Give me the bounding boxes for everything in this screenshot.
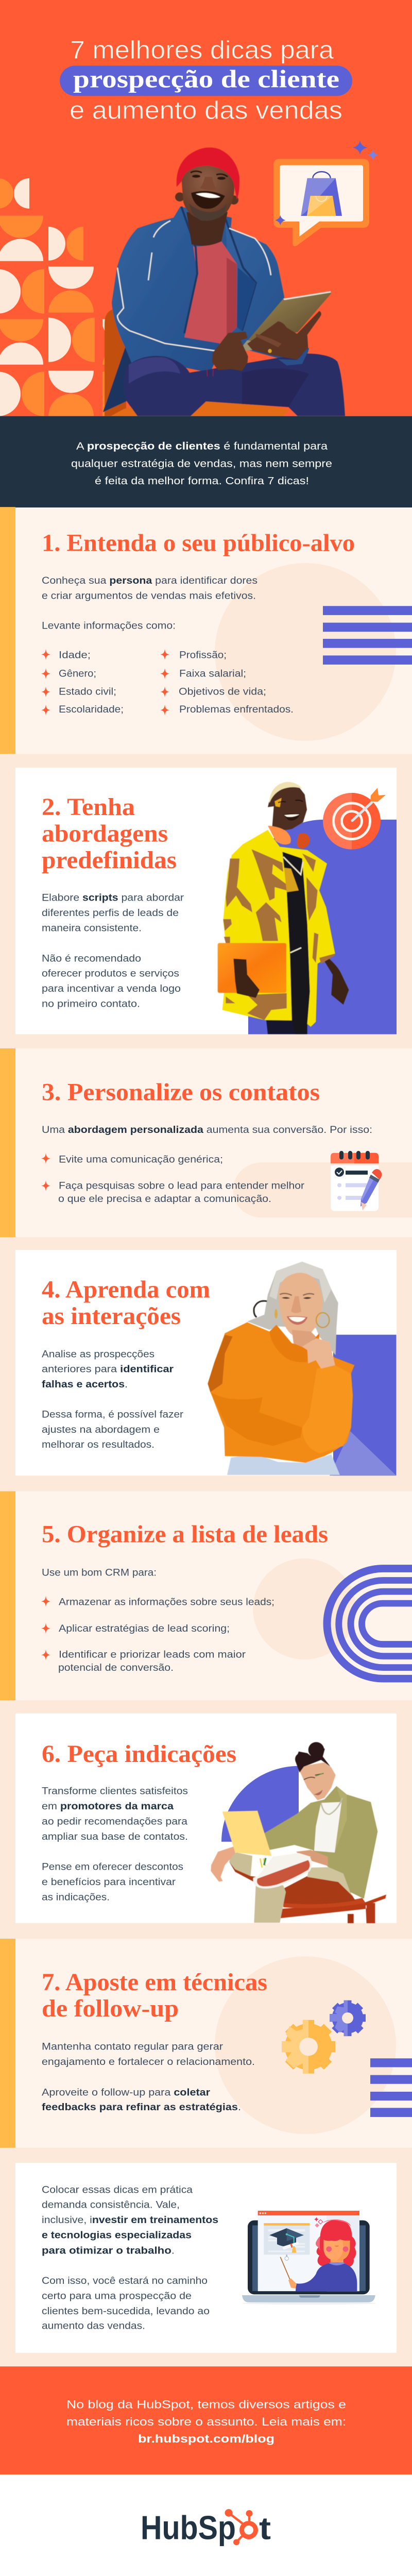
text: tip 2 body: Elabore scripts para abordar <box>42 892 184 904</box>
list: attributes right column: Objetivos de vida; <box>179 686 266 698</box>
text: conclusion body: aumento das vendas. <box>42 2320 145 2332</box>
text: tip 6 body: Pense em oferecer descontos <box>42 1861 183 1873</box>
purple backdrop shape <box>330 1335 397 1476</box>
text: conclusion body: certo para uma prospecção de <box>42 2291 192 2301</box>
photo: hands and tablet <box>207 291 331 376</box>
title: e aumento das vendas <box>70 96 342 124</box>
text: tip 7 body: feedbacks para refinar as estratégias . <box>42 2102 241 2113</box>
text: conclusion body: inclusive, i nvestir em treinamentos <box>42 2214 218 2226</box>
list: tip 3: Evite uma comunicação genérica; <box>59 1154 223 1165</box>
text: tip 2 body: oferecer produtos e serviços <box>42 968 179 979</box>
text: tip 2 body: para incentivar a venda logo <box>42 983 181 994</box>
list: attributes left column: Idade; <box>59 650 91 661</box>
list: attributes right column: Problemas enfrentados. <box>179 704 294 715</box>
text: conclusion body: Colocar essas dicas em prática <box>42 2184 193 2195</box>
text: intro paragraph: qualquer estratégia de vendas, mas nem sempre <box>71 458 332 470</box>
text: intro paragraph: A prospecção de clientes é fundamental para <box>76 440 328 452</box>
list: tip 3: o que ele precisa e adaptar a comunicação. <box>58 1193 271 1205</box>
list: attributes left column <box>41 649 124 716</box>
logo: HubSpot: t <box>259 2511 271 2546</box>
text: tip 2 body: maneira consistente. <box>42 923 142 934</box>
decorative circle and bars <box>215 1956 412 2134</box>
list: attributes right column <box>160 649 294 716</box>
geometric pattern <box>0 178 116 416</box>
photo: person with laptop on stool <box>211 1742 386 1923</box>
text: tip 6 body: e benefícios para incentivar <box>42 1876 176 1888</box>
heading: tip 7 <box>42 1969 267 2022</box>
logo: HubSpot: o <box>243 2521 255 2544</box>
list: attributes right column: Faixa salarial; <box>179 668 246 679</box>
purple backdrop shape <box>248 820 397 1034</box>
text: tip 6 body: ao pedir recomendações para <box>42 1816 188 1827</box>
text: tip 4 body: Analise as prospecções <box>42 1348 154 1360</box>
text: tip 1 body: Conheça sua persona para identificar dores <box>42 575 258 586</box>
heading: tip 6: 6. Peça indicações <box>42 1740 236 1768</box>
heading: tip 3: 3. Personalize os contatos <box>42 1079 320 1106</box>
icon: yellow gear <box>282 2020 335 2074</box>
text: intro paragraph <box>71 440 332 487</box>
heading: tip 2: predefinidas <box>42 846 177 874</box>
text: tip 6 body <box>42 1786 188 1903</box>
list: attributes left column: Escolaridade; <box>59 704 124 715</box>
heading: tip 2: 2. Tenha <box>42 793 135 821</box>
decorative circle <box>253 1558 356 1659</box>
list: tip 5: Identificar e priorizar leads com maior <box>59 1649 246 1660</box>
list: tip 5: Armazenar as informações sobre seus leads; <box>59 1597 274 1608</box>
heading: tip 1: 1. Entenda o seu público-alvo <box>42 530 355 556</box>
list: attributes left column: Estado civil; <box>59 686 116 698</box>
text: tip 6 body: ampliar sua base de contatos. <box>42 1831 188 1842</box>
illustration: online teacher on laptop <box>242 2211 376 2304</box>
text: tip 4 body: ajustes na abordagem e <box>42 1424 160 1435</box>
heading: tip 2: abordagens <box>42 820 168 847</box>
panel: tip 3 <box>0 1048 412 1237</box>
text: conclusion body: e tecnologias especializadas <box>42 2230 192 2241</box>
text: conclusion body: Com isso, você estará no caminho <box>42 2275 208 2286</box>
text: tip 2 body: diferentes perfis de leads de <box>42 907 179 919</box>
heading: tip 4: as interações <box>42 1303 181 1330</box>
title <box>60 36 352 124</box>
list: tip 3 <box>41 1153 304 1205</box>
text: tip 4 body: falhas e acertos . <box>42 1379 128 1390</box>
panel: intro <box>0 416 412 507</box>
panel: tip 7 <box>0 1939 412 2148</box>
heading: tip 7: 7. Aposte em técnicas <box>42 1969 267 1996</box>
logo: HubSpot: HubSp <box>141 2509 236 2546</box>
text: tip 4 body: melhorar os resultados. <box>42 1439 154 1450</box>
heading: tip 2 <box>42 793 177 874</box>
text: call to action: No blog da HubSpot, temos diversos artigos e <box>66 2398 346 2411</box>
panel: tip 6 <box>15 1714 397 1923</box>
icon: calendar checklist with pencil <box>331 1151 382 1211</box>
panel: hero header <box>0 0 412 416</box>
text: tip 7 body: engajamento e fortalecer o relacionamento. <box>42 2056 255 2067</box>
list: tip 5 <box>41 1596 274 1673</box>
text: tip 7 body <box>42 2041 255 2113</box>
icon: purple gear <box>330 2001 366 2036</box>
text: tip 6 body: em promotores da marca <box>42 1801 174 1812</box>
heading: tip 7: de follow-up <box>42 1995 179 2022</box>
panel: tip 2 <box>15 768 397 1034</box>
decorative purple arcs <box>327 1569 412 1679</box>
text: tip 3 intro: Uma abordagem personalizada aumenta sua conversão. Por isso: <box>42 1124 372 1136</box>
list: attributes left column: Gênero; <box>59 668 96 679</box>
icon: target with arrow <box>323 788 386 850</box>
icon: speech bubble with shopping bag <box>273 140 379 246</box>
photo: smiling man with tablet <box>103 147 345 416</box>
list: attributes right column: Profissão; <box>179 650 227 661</box>
text: tip 2 body: Não é recomendado <box>42 953 141 964</box>
text: call to action: br.hubspot.com/blog <box>138 2432 274 2445</box>
text: tip 4 body <box>42 1348 183 1450</box>
text: tip 5 intro: Use um bom CRM para: <box>42 1567 157 1579</box>
text: tip 4 body: Dessa forma, é possível fazer <box>42 1409 183 1420</box>
purple quarter circle <box>221 1766 299 1842</box>
heading: tip 5: 5. Organize a lista de leads <box>42 1521 328 1548</box>
text: call to action <box>66 2398 346 2445</box>
panel: call to action <box>0 2366 412 2475</box>
photo: smiling woman in orange sweater <box>208 1262 354 1475</box>
decorative pill <box>233 1162 412 1217</box>
list: tip 3: Faça pesquisas sobre o lead para entender melhor <box>59 1180 304 1191</box>
text: call to action: materiais ricos sobre o assunto. Leia mais em: <box>66 2415 346 2428</box>
heading: tip 4 <box>42 1276 210 1330</box>
panel: tip 5 <box>0 1492 412 1700</box>
text: intro paragraph: é feita da melhor forma. Confira 7 dicas! <box>95 475 309 487</box>
photo: man in yellow coat with laptop <box>218 782 349 1034</box>
text: tip 1 body: e criar argumentos de vendas mais efetivos. <box>42 590 256 601</box>
panel: tip 1 <box>0 507 412 754</box>
title: 7 melhores dicas para <box>70 36 334 64</box>
text: conclusion body: demanda consistência. Vale, <box>42 2199 180 2210</box>
decorative circle and bars <box>215 563 412 741</box>
text: conclusion body <box>42 2184 218 2332</box>
text: tip 6 body: Transforme clientes satisfeitos <box>42 1786 188 1797</box>
title: prospecção de cliente <box>73 65 339 93</box>
panel: footer <box>0 2475 412 2576</box>
text: conclusion body: clientes bem-sucedida, levando ao <box>42 2306 210 2317</box>
text: tip 6 body: as indicações. <box>42 1892 110 1903</box>
text: tip 2 body <box>42 892 184 1009</box>
panel: conclusion <box>15 2163 397 2353</box>
panel: tip 4 <box>15 1250 397 1476</box>
list: tip 5: Aplicar estratégias de lead scoring; <box>59 1623 230 1634</box>
list: tip 5: potencial de conversão. <box>58 1662 174 1673</box>
text: tip 7 body: Aproveite o follow-up para coletar <box>42 2087 210 2098</box>
text: tip 4 body: anteriores para identificar <box>42 1364 174 1375</box>
text: conclusion body: para otimizar o trabalho . <box>42 2245 175 2257</box>
text: tip 1 body <box>42 575 258 631</box>
text: tip 7 body: Mantenha contato regular para gerar <box>42 2041 223 2053</box>
text: tip 2 body: no primeiro contato. <box>42 998 140 1009</box>
text: tip 1 body: Levante informações como: <box>42 620 176 631</box>
heading: tip 4: 4. Aprenda com <box>42 1276 210 1303</box>
